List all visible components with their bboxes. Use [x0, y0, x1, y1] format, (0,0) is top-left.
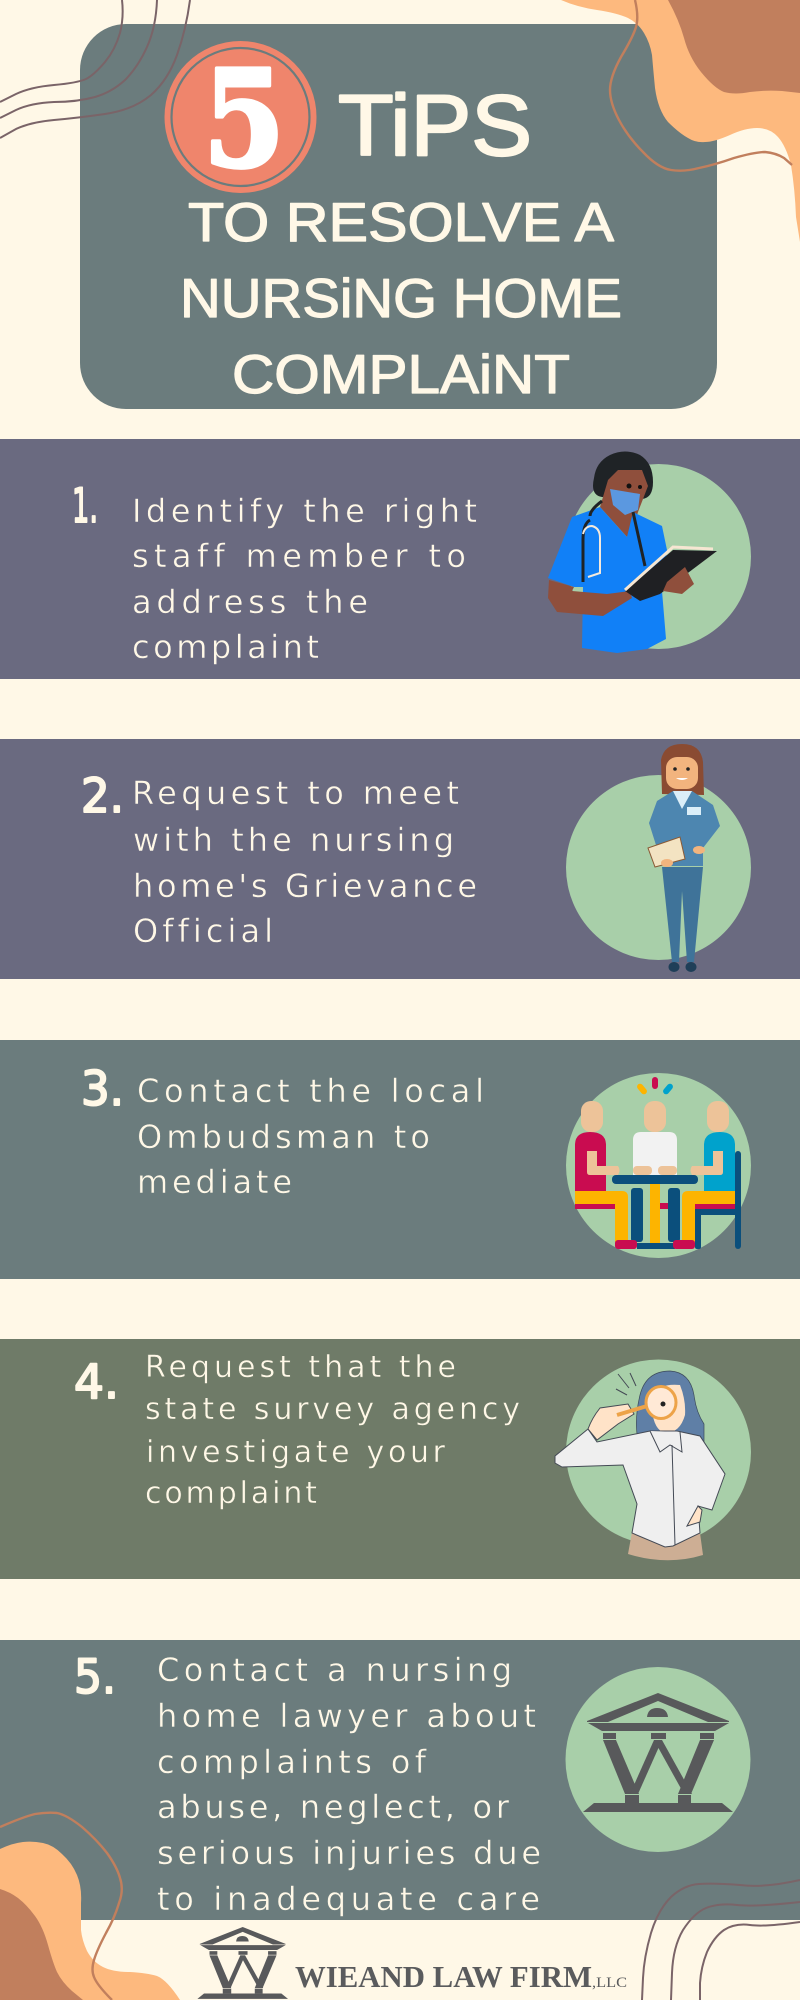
tip 2 text: with the nursing: [133, 821, 454, 859]
title text: COMPLAiNT: [232, 343, 570, 405]
title text: TiPS: [338, 78, 532, 174]
decoration: top right blobs and line: [561, 0, 800, 242]
title text: [180, 78, 622, 405]
footer firm name: WIEAND LAW FIRM: [295, 1959, 592, 1994]
band 1 panel: [0, 439, 800, 679]
tip 1 text: address the: [132, 583, 368, 621]
tip 5 number: 5.: [74, 1650, 116, 1705]
decoration: top left lines: [0, 0, 190, 138]
tip 3 text: [137, 1072, 484, 1201]
title text: TO RESOLVE A: [188, 191, 614, 253]
tip 3 text: Ombudsman to: [137, 1118, 430, 1156]
tip 5 text: home lawyer about: [157, 1697, 536, 1735]
tip 5 text: to inadequate care: [157, 1880, 540, 1918]
tip 4 text: state survey agency: [145, 1392, 520, 1427]
header panel: [80, 24, 717, 409]
band 5 panel: [0, 1640, 800, 1920]
tip 5 text: complaints of: [157, 1743, 427, 1781]
decoration: bottom right lines: [642, 1880, 800, 2000]
tip 1 text: [132, 492, 477, 666]
tip 4 text: [145, 1350, 520, 1511]
tip 4 text: investigate your: [146, 1435, 446, 1470]
tip 1 text: complaint: [132, 628, 319, 666]
footer firm name: ,LLC: [592, 1975, 627, 1991]
title badge: number 5: 5: [203, 40, 285, 198]
decoration: bottom left blobs and line: [0, 1813, 180, 2000]
tip 2 text: home's Grievance: [133, 867, 477, 905]
tip 1 text: staff member to: [132, 537, 466, 575]
tip 2 text: [132, 774, 477, 950]
illustration: nurse with clipboard: [548, 452, 751, 653]
tip 2 text: Request to meet: [132, 774, 459, 812]
band 3 panel: [0, 1040, 800, 1279]
tip 2 number: 2.: [81, 769, 124, 824]
tip 4 text: Request that the: [145, 1350, 456, 1385]
tip 4 text: complaint: [145, 1476, 317, 1511]
tip 3 number: 3.: [81, 1062, 124, 1117]
title badge: number 5: [164, 40, 316, 198]
circle with law firm logo: [566, 1667, 750, 1852]
tip 5 text: abuse, neglect, or: [157, 1788, 510, 1826]
tip 5 text: serious injuries due: [157, 1834, 541, 1872]
tip 1 text: Identify the right: [132, 492, 477, 530]
title text: NURSiNG HOME: [180, 267, 622, 329]
illustration: nurse with book: [566, 744, 751, 972]
tip 1 number: 1.: [72, 479, 98, 534]
illustration: people meeting at table: [566, 1073, 751, 1258]
band 2 panel: [0, 739, 800, 979]
tip 3 text: mediate: [137, 1163, 292, 1201]
tip 5 text: Contact a nursing: [157, 1651, 512, 1689]
tip 2 text: Official: [133, 912, 273, 950]
tip 5 text: [157, 1651, 541, 1918]
illustration: woman with magnifying glass: [555, 1360, 751, 1560]
footer logo: [197, 1927, 288, 1999]
band 4 panel: [0, 1339, 800, 1579]
tip 3 text: Contact the local: [137, 1072, 484, 1110]
tip 4 number: 4.: [74, 1355, 119, 1410]
